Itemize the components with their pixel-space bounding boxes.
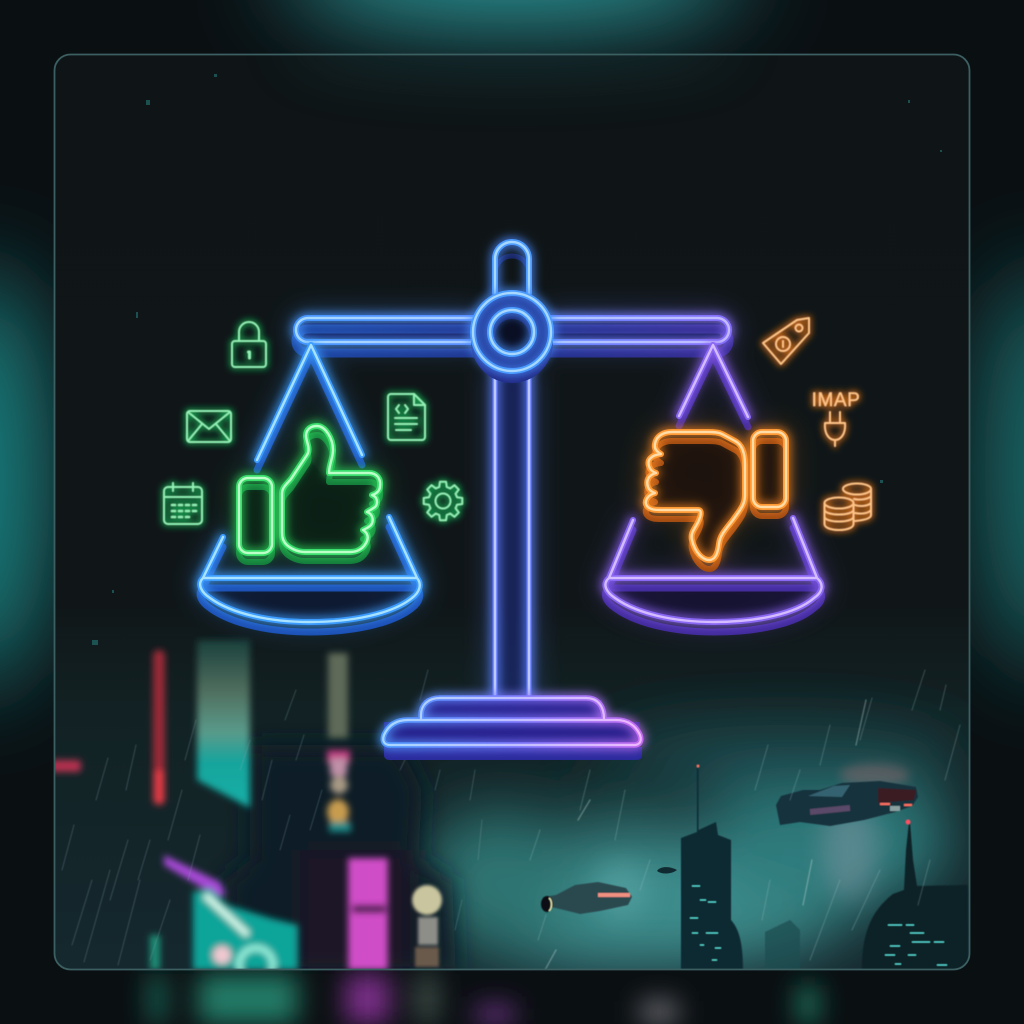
flying car: large — [776, 781, 918, 826]
icon: price tag — [763, 318, 809, 364]
scale beam — [296, 318, 729, 353]
icon: code document — [388, 394, 425, 440]
icon: coins — [824, 484, 871, 530]
flying car: small left — [541, 882, 632, 914]
right pan — [605, 345, 822, 632]
scale column and post — [495, 242, 529, 698]
icon: IMAP plug — [812, 390, 860, 446]
icon: envelope — [187, 411, 231, 442]
left pan — [200, 345, 420, 632]
balance scale — [200, 242, 822, 760]
icon: thumbs down — [646, 432, 786, 569]
bottom reflections — [150, 974, 818, 1024]
flying car: distant — [657, 867, 677, 874]
dust specks — [92, 74, 942, 645]
street lamp — [412, 885, 442, 967]
icon: padlock — [232, 322, 266, 367]
fog: teal storm clouds — [420, 725, 960, 970]
text: IMAP: IMAP — [812, 390, 860, 411]
scale hub — [471, 293, 553, 383]
wide halo — [200, 318, 822, 697]
rain — [62, 670, 960, 970]
scale base — [383, 698, 642, 760]
blurred dark buildings — [225, 745, 456, 975]
icon: gear — [424, 482, 462, 520]
city silhouettes — [681, 764, 968, 970]
blurred neon signs — [50, 640, 388, 982]
icon: thumbs up — [239, 426, 380, 562]
icon: calendar — [164, 483, 202, 524]
